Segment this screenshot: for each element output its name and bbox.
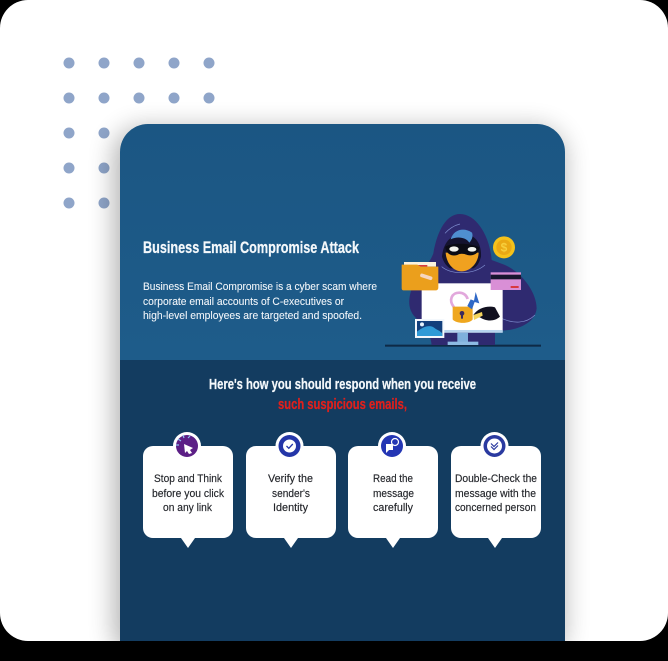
folder xyxy=(404,262,436,267)
lightning bolt xyxy=(467,292,479,309)
panel: infographic card xyxy=(114,124,565,658)
step card 3 xyxy=(348,432,438,548)
step card 3: message xyxy=(373,488,414,500)
description text: corporate email accounts of C-executives or xyxy=(143,296,344,308)
hoodie highlights xyxy=(442,224,535,322)
title: Business Email Compromise Attack xyxy=(143,238,359,257)
credit card xyxy=(491,272,521,290)
step card 3: carefully xyxy=(373,502,414,514)
hair xyxy=(451,230,473,243)
hacker hoodie xyxy=(409,214,537,345)
floor line xyxy=(385,345,541,347)
face xyxy=(446,253,479,271)
step card 3: Read the xyxy=(373,473,413,485)
padlock xyxy=(451,293,468,307)
step card 4: message with the xyxy=(455,488,536,500)
step card 1: on any link xyxy=(163,502,213,514)
icon: verified badge xyxy=(276,432,304,460)
description text xyxy=(143,281,377,322)
step card 2: sender's xyxy=(272,488,311,500)
hand xyxy=(473,307,500,321)
description text: Business Email Compromise is a cyber scam where xyxy=(143,281,377,293)
coin xyxy=(493,236,515,258)
heading: respond: Here's how you should respond when you receive xyxy=(209,376,476,393)
picture frame xyxy=(415,319,444,338)
illustration: hooded hacker at a computer xyxy=(385,214,541,347)
monitor xyxy=(422,283,503,333)
panel: top section xyxy=(120,124,565,360)
illustration: hooded hacker at a computer: $ xyxy=(501,241,508,255)
step card 2: Verify the xyxy=(268,473,313,485)
step card 2: Identity xyxy=(273,502,309,514)
icon: double check xyxy=(480,432,508,460)
step card 4: Double-Check the xyxy=(455,473,537,485)
mask xyxy=(445,244,479,256)
step card 1: before you click xyxy=(152,488,225,500)
step card 1: Stop and Think xyxy=(154,473,223,485)
icon: click xyxy=(173,432,201,460)
face opening xyxy=(442,234,481,268)
step card 2 xyxy=(246,432,336,548)
heading: such suspicious emails: such suspicious emails, xyxy=(278,396,407,413)
step card 1 xyxy=(143,432,233,548)
step card 4 xyxy=(451,432,541,548)
step card 4: concerned person xyxy=(455,502,536,514)
dot grid xyxy=(64,58,214,208)
description text: high-level employees are targeted and spoofed. xyxy=(143,310,362,322)
panel: bottom section xyxy=(120,360,565,641)
icon: message xyxy=(378,432,406,460)
